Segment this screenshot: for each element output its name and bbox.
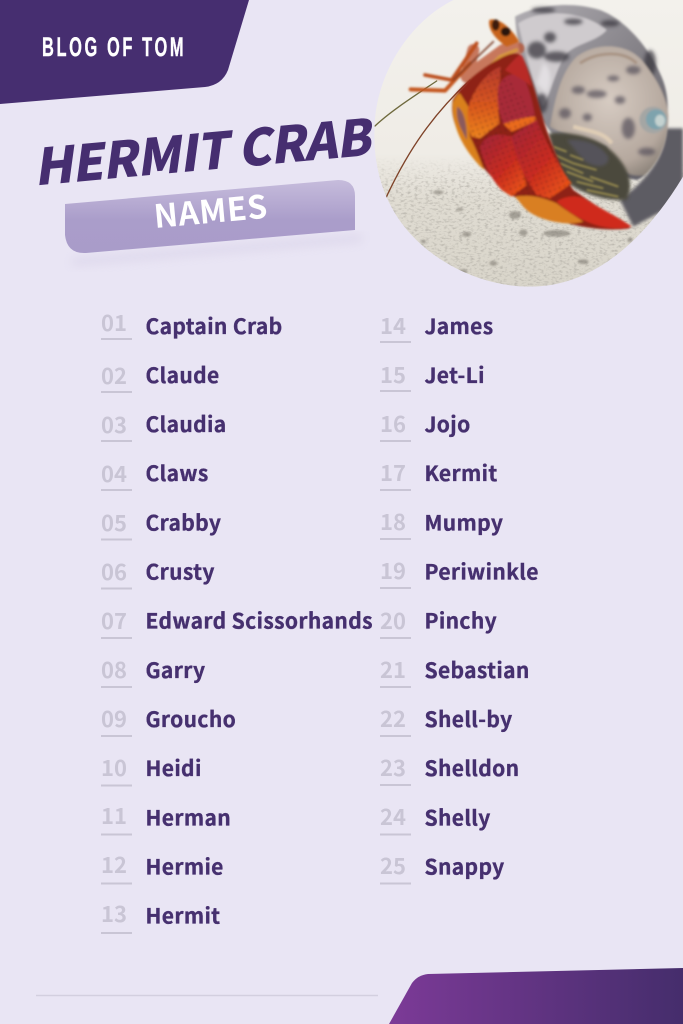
item 17 bbox=[380, 456, 498, 490]
item 24: Shelly bbox=[424, 802, 491, 832]
item 24: 24 bbox=[380, 800, 406, 832]
name list: column 2 bbox=[380, 309, 539, 884]
item 04 bbox=[101, 457, 209, 490]
item 13 bbox=[101, 897, 220, 933]
top-left banner bbox=[0, 0, 249, 104]
item 01: Captain Crab bbox=[146, 311, 283, 341]
shell main whorl bbox=[550, 46, 668, 176]
item 25 bbox=[380, 849, 505, 884]
item 08 bbox=[101, 653, 205, 687]
item 15: 15 bbox=[380, 358, 406, 390]
crab carapace centre bbox=[468, 67, 501, 138]
item 08: Garry bbox=[146, 655, 205, 685]
crab walking legs bbox=[411, 42, 518, 91]
shell bbox=[515, 5, 668, 180]
item 15: Jet-Li bbox=[424, 360, 485, 390]
item 13: 13 bbox=[101, 897, 127, 929]
item 06 bbox=[101, 555, 215, 588]
item 20: Pinchy bbox=[424, 606, 497, 636]
item 01: 01 bbox=[101, 306, 127, 338]
crab hairy leg bbox=[548, 133, 630, 200]
item 01 bbox=[101, 306, 283, 341]
item 07: Edward Scissorhands bbox=[146, 606, 373, 636]
item 02 bbox=[101, 359, 220, 392]
ribbon: Names bbox=[65, 180, 362, 262]
item 06: Crusty bbox=[146, 556, 215, 586]
photo: hermit crab on sand bbox=[370, 0, 683, 295]
item 11: Herman bbox=[146, 802, 231, 832]
item 21: Sebastian bbox=[424, 655, 530, 685]
item 23: Shelldon bbox=[424, 753, 520, 783]
crab bbox=[411, 19, 632, 229]
item 22 bbox=[380, 702, 513, 736]
item 04: Claws bbox=[146, 458, 209, 488]
item 13: Hermit bbox=[146, 900, 220, 930]
crab body base bbox=[452, 54, 630, 229]
item 10: Heidi bbox=[146, 753, 202, 783]
item 23: 23 bbox=[380, 751, 406, 783]
item 11 bbox=[101, 799, 231, 834]
item 25: Snappy bbox=[424, 852, 505, 882]
item 24 bbox=[380, 800, 491, 834]
item 20: 20 bbox=[380, 604, 406, 636]
item 18 bbox=[380, 505, 503, 539]
crab claw spots bbox=[468, 67, 572, 198]
sand background bbox=[370, 0, 683, 295]
item 12 bbox=[101, 848, 224, 884]
item 17: Kermit bbox=[424, 458, 498, 488]
crab antennae bbox=[375, 80, 470, 202]
shell upper whorl bbox=[515, 5, 668, 180]
item 16: Jojo bbox=[424, 409, 471, 439]
title group bbox=[33, 96, 380, 262]
item 04: 04 bbox=[101, 457, 127, 489]
item 10: 10 bbox=[101, 751, 127, 783]
item 11: 11 bbox=[101, 799, 127, 831]
ribbon: Names: NAMES bbox=[152, 182, 269, 238]
name list: column 1 bbox=[101, 306, 373, 933]
item 17: 17 bbox=[380, 456, 406, 488]
item 19: 19 bbox=[380, 554, 406, 586]
item 05 bbox=[101, 506, 221, 540]
item 14: James bbox=[424, 311, 493, 341]
item 10 bbox=[101, 751, 202, 786]
item 12: Hermie bbox=[146, 852, 224, 882]
item 03: Claudia bbox=[146, 409, 227, 439]
crab carapace left bbox=[453, 93, 484, 170]
item 14 bbox=[380, 309, 493, 342]
crab claw tips bbox=[515, 196, 583, 223]
item 20 bbox=[380, 604, 497, 638]
item 08: 08 bbox=[101, 653, 127, 685]
shadow under shell bbox=[620, 128, 683, 227]
item 14: 14 bbox=[380, 309, 406, 341]
item 09 bbox=[101, 702, 236, 736]
brand name: BLOG OF TOM bbox=[42, 32, 186, 62]
item 21: 21 bbox=[380, 653, 406, 685]
item 22: 22 bbox=[380, 702, 406, 734]
item 18: 18 bbox=[380, 505, 406, 537]
item 03: 03 bbox=[101, 408, 127, 440]
crab eye stalks bbox=[489, 19, 519, 47]
item 21 bbox=[380, 653, 530, 687]
item 05: 05 bbox=[101, 506, 127, 538]
item 06: 06 bbox=[101, 555, 127, 587]
item 09: Groucho bbox=[146, 704, 236, 734]
bottom-right footer banner bbox=[389, 968, 683, 1024]
item 23 bbox=[380, 751, 520, 785]
item 02: Claude bbox=[146, 360, 220, 390]
item 15 bbox=[380, 358, 485, 391]
crab large claw bbox=[480, 135, 527, 197]
item 19 bbox=[380, 554, 539, 588]
item 12: 12 bbox=[101, 848, 127, 880]
item 22: Shell-by bbox=[424, 704, 513, 734]
item 03 bbox=[101, 408, 227, 441]
item 02: 02 bbox=[101, 359, 127, 391]
item 07: 07 bbox=[101, 604, 127, 636]
shell spire tip bbox=[639, 107, 667, 133]
item 19: Periwinkle bbox=[424, 556, 539, 586]
item 05: Crabby bbox=[146, 508, 221, 538]
item 18: Mumpy bbox=[424, 508, 503, 538]
item 09: 09 bbox=[101, 702, 127, 734]
heading: Hermit Crab: HERMIT CRAB bbox=[33, 96, 380, 201]
item 16 bbox=[380, 407, 471, 441]
item 25: 25 bbox=[380, 849, 406, 881]
item 16: 16 bbox=[380, 407, 406, 439]
